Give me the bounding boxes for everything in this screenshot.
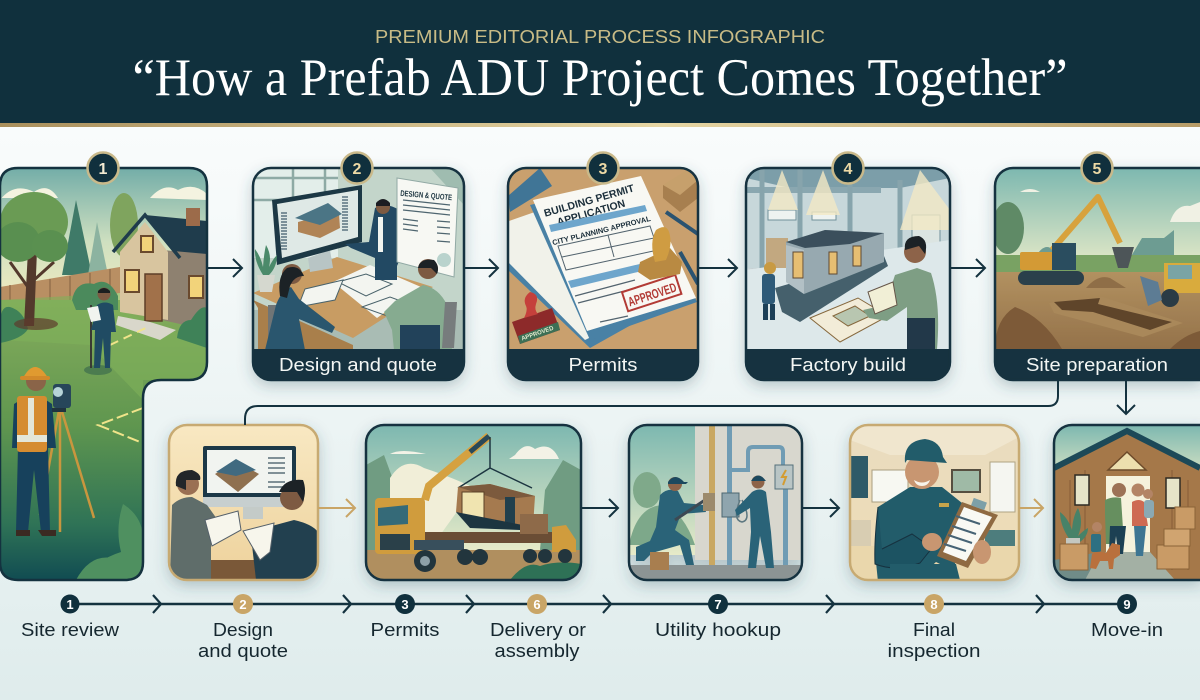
panel 10: move-in	[1054, 425, 1200, 580]
arrow 4 to 5	[950, 259, 985, 277]
header banner	[0, 0, 1200, 127]
label: final inspection: inspection	[888, 641, 980, 661]
label: utility hookup: Utility hookup	[655, 620, 781, 640]
client right	[384, 259, 457, 350]
label: delivery or assembly: assembly	[494, 641, 580, 661]
modular unit	[786, 230, 884, 294]
family	[1091, 483, 1154, 556]
arrow lower 3 to 4	[802, 499, 839, 517]
label: design and quote: and quote	[198, 641, 288, 661]
monitor	[203, 446, 296, 519]
surveyor with total station	[12, 367, 94, 536]
arrow lower 4 to 5	[1019, 499, 1043, 517]
module	[456, 484, 535, 530]
panel 1: site review	[0, 168, 207, 580]
eyebrow heading: PREMIUM EDITORIAL PROCESS INFOGRAPHIC	[375, 27, 825, 47]
factory worker	[762, 262, 776, 320]
panel 8: utility hookup	[629, 425, 802, 580]
quote poster	[397, 178, 458, 277]
arrow lower 1 to 2	[318, 499, 355, 517]
timeline dot 2	[233, 594, 253, 614]
panel 9: final inspection	[850, 425, 1019, 582]
step badge 3	[588, 152, 618, 184]
client left	[265, 264, 335, 350]
potted plant	[255, 245, 277, 292]
right reviewer	[243, 480, 318, 580]
timeline dot 3: 3	[401, 597, 409, 612]
timeline dot 7	[708, 594, 728, 614]
timeline dot 6	[527, 594, 547, 614]
label: move-in: Move-in	[1091, 620, 1163, 640]
excavator	[1018, 197, 1134, 285]
house	[113, 208, 207, 340]
arrow 5 down	[1117, 380, 1135, 414]
conveyor base	[775, 256, 888, 322]
step badge 1	[88, 152, 118, 184]
panel 3: permits	[508, 168, 698, 380]
permit documents: APPLICATION	[556, 198, 627, 229]
step badge 3: 3	[599, 161, 608, 178]
box	[663, 182, 697, 212]
trench	[1064, 315, 1182, 337]
arrow 2 to 3	[464, 259, 498, 277]
label: design and quote	[198, 620, 288, 661]
connector from step 5 to lower row	[245, 380, 1058, 425]
caption: Permits	[568, 355, 638, 375]
label: delivery or assembly	[490, 620, 586, 661]
quote poster: DESIGN & QUOTE	[400, 189, 453, 202]
red stamp: APPROVED	[521, 326, 555, 342]
timeline dot 2: 2	[239, 597, 247, 612]
timeline dot 3	[395, 594, 415, 614]
timeline	[60, 594, 1137, 614]
step badge 4	[832, 152, 864, 184]
label: site review: Site review	[21, 620, 120, 640]
title: “How a Prefab ADU Project Comes Together”	[132, 49, 1068, 107]
kneeling worker	[636, 477, 715, 570]
pipes	[709, 425, 793, 565]
caption: Factory build	[790, 355, 906, 375]
crane	[425, 436, 532, 500]
step badge 1: 1	[99, 161, 108, 178]
step badge 2: 2	[353, 161, 362, 178]
standing worker	[735, 476, 774, 568]
blue book	[508, 168, 552, 212]
flatbed truck	[375, 498, 576, 572]
permit documents: BUILDING PERMIT	[543, 182, 636, 220]
timeline dot 8	[924, 594, 944, 614]
timeline dot 9	[1117, 594, 1137, 614]
timeline dot 1	[60, 594, 80, 614]
foreground plant	[76, 504, 143, 580]
label: permits: Permits	[370, 620, 440, 640]
label: final inspection	[888, 620, 980, 661]
step badge 4: 4	[844, 161, 853, 178]
floor panel	[810, 298, 888, 342]
step badge 2	[342, 152, 372, 184]
dog	[1090, 543, 1120, 569]
step badge 5	[1082, 152, 1112, 184]
step badge 5: 5	[1093, 161, 1102, 178]
panel 7: delivery	[366, 425, 581, 580]
permit documents: CITY PLANNING APPROVAL	[551, 214, 652, 247]
timeline dot 7: 7	[714, 597, 722, 612]
arrow 3 to 4	[698, 259, 737, 277]
inspector	[863, 236, 938, 350]
computer monitor	[272, 185, 362, 272]
label: final inspection: Final	[913, 620, 955, 640]
red stamp	[512, 292, 560, 344]
presenter	[345, 199, 402, 280]
label: delivery or assembly: Delivery or	[490, 620, 586, 640]
left reviewer	[170, 470, 241, 580]
timeline dot 1: 1	[66, 597, 74, 612]
moving boxes	[1060, 507, 1195, 570]
panel 5: site preparation	[992, 168, 1200, 380]
inspector	[875, 439, 998, 582]
panel 6: consultation review	[169, 425, 318, 580]
timeline dot 9: 9	[1123, 597, 1131, 612]
permit documents: APPROVED	[626, 280, 678, 309]
timeline dot 6: 6	[533, 597, 541, 612]
label: design and quote: Design	[213, 620, 273, 640]
loader	[1140, 263, 1200, 307]
arrow 1 to 2	[207, 259, 242, 277]
caption: Design and quote	[279, 355, 437, 375]
panel 4: factory build	[746, 168, 950, 380]
panel 2: design and quote	[253, 168, 464, 380]
surveyor figure	[84, 288, 116, 375]
caption: Site preparation	[1026, 355, 1168, 375]
desk and plans	[253, 257, 433, 350]
timeline dot 8: 8	[930, 597, 938, 612]
arrow lower 2 to 3	[581, 499, 618, 517]
plant	[1060, 508, 1088, 542]
permit documents	[508, 176, 697, 348]
gold stamp	[638, 227, 682, 280]
